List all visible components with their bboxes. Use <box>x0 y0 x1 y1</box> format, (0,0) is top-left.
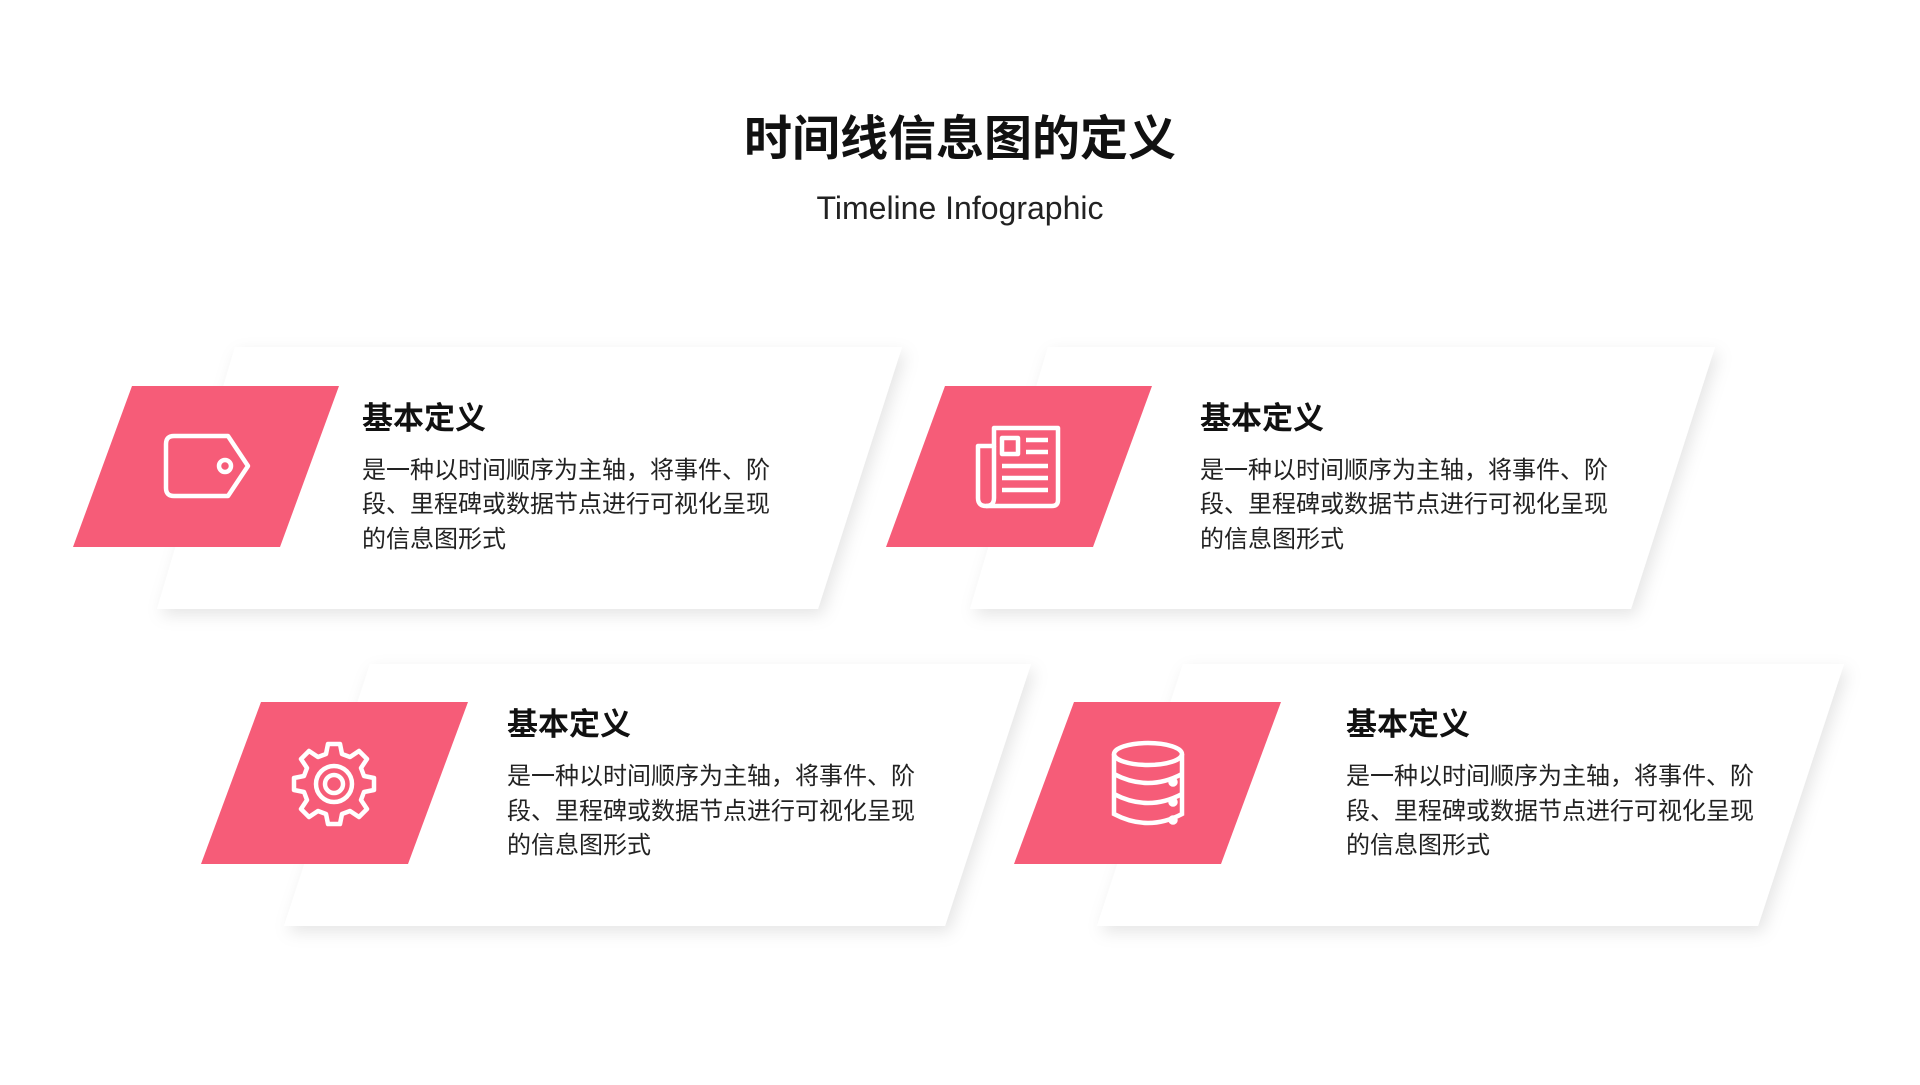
text block 1: 段、里程碑或数据节点进行可视化呈现 <box>362 491 770 518</box>
icon: newspaper <box>978 428 1058 506</box>
text block 4: 是一种以时间顺序为主轴，将事件、阶 <box>1346 763 1754 790</box>
text block 1: 是一种以时间顺序为主轴，将事件、阶 <box>362 457 770 484</box>
panel: card 4 <box>1014 664 1844 926</box>
text block 2: 的信息图形式 <box>1200 526 1344 553</box>
panel: card 3 <box>201 664 1031 926</box>
text block 4: 段、里程碑或数据节点进行可视化呈现 <box>1346 798 1754 825</box>
text block 3: 段、里程碑或数据节点进行可视化呈现 <box>507 798 915 825</box>
text block 4: 的信息图形式 <box>1346 832 1490 859</box>
heading 3: 基本定义 <box>507 707 631 742</box>
icon: database <box>1114 743 1182 823</box>
icon: gear <box>294 744 374 824</box>
text block 1: 的信息图形式 <box>362 526 506 553</box>
icon: tag <box>166 436 248 496</box>
heading 1: 基本定义 <box>362 401 486 436</box>
text block 3: 是一种以时间顺序为主轴，将事件、阶 <box>507 763 915 790</box>
subtitle: Timeline Infographic <box>817 190 1103 226</box>
heading 2: 基本定义 <box>1200 401 1324 436</box>
panel: card 2 <box>886 347 1715 609</box>
text block 3: 的信息图形式 <box>507 832 651 859</box>
heading 4: 基本定义 <box>1346 707 1470 742</box>
text block 2: 段、里程碑或数据节点进行可视化呈现 <box>1200 491 1608 518</box>
title: 时间线信息图的定义 <box>744 113 1176 166</box>
text block 2: 是一种以时间顺序为主轴，将事件、阶 <box>1200 457 1608 484</box>
panel: card 1 <box>73 347 902 609</box>
